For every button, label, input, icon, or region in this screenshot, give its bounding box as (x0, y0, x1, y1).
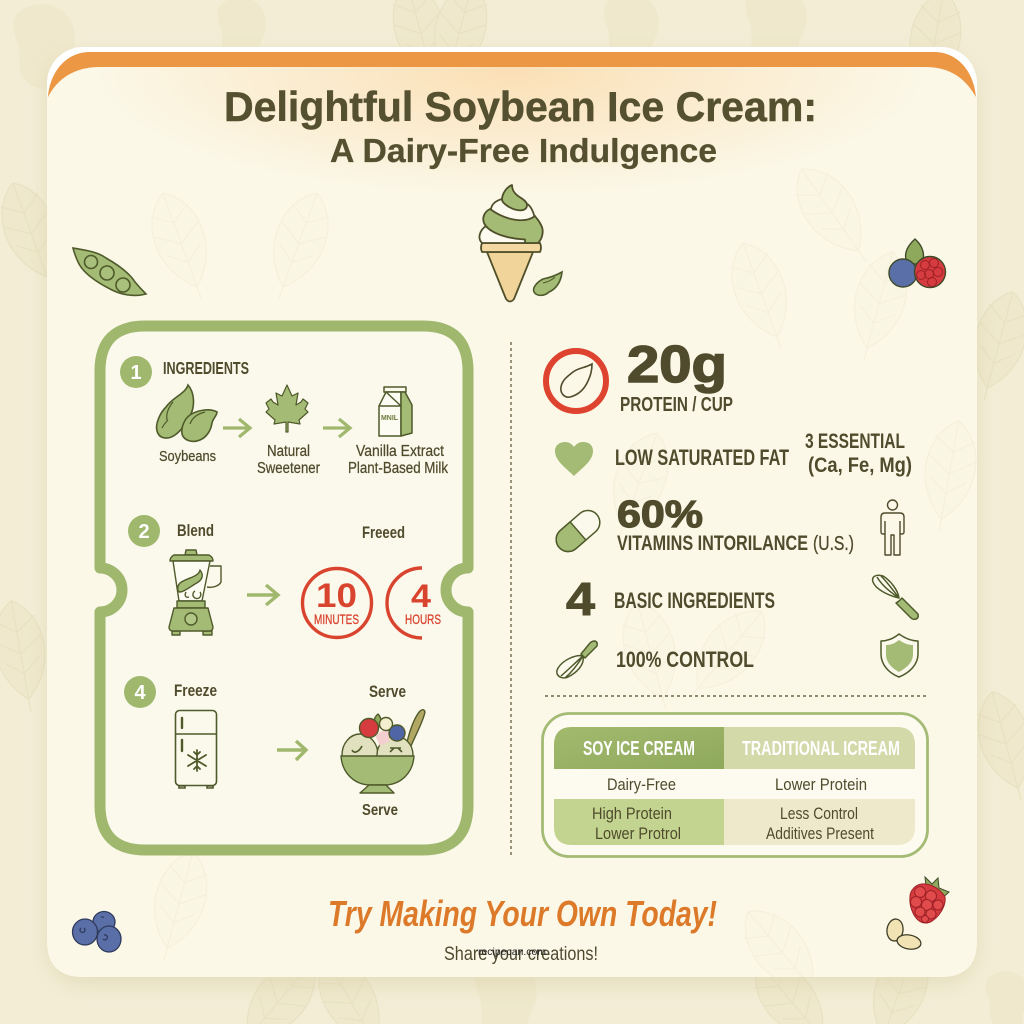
subtitle: A Dairy-Free Indulgence (330, 132, 717, 169)
title: Delightful Soybean Ice Cream: (224, 83, 817, 130)
stat: low saturated fat: LOW SATURATED FAT (615, 445, 789, 470)
row: less control (724, 799, 915, 845)
footer note: Share your creations! (444, 944, 598, 965)
icon: blender (169, 550, 221, 635)
label: natural sweetener: Natural (267, 443, 310, 460)
timer: 4 hours: HOURS (405, 611, 441, 627)
row: less control: Less Control (780, 805, 858, 823)
step 1 badge: 1 (130, 362, 142, 384)
stat: 60% vitamins: VITAMINS INTORILANCE (617, 532, 808, 555)
panel: recipe steps (100, 326, 468, 850)
icon: blueberries (72, 912, 121, 952)
timer: 10 minutes (302, 568, 372, 638)
arrow (247, 585, 278, 605)
row: lower protein: Lower Protein (775, 776, 867, 794)
timer: 10 minutes: 10 (316, 577, 357, 615)
stat: 60% vitamins: (U.S.) (813, 533, 854, 555)
stat: 3 essential minerals: (Ca, Fe, Mg) (808, 454, 912, 477)
stat: low saturated fat (555, 442, 789, 476)
source credit: recipecan.com (478, 947, 546, 958)
step 4 badge (124, 676, 156, 708)
icon: soft serve cone (479, 185, 543, 302)
icon: soybeans (157, 385, 217, 441)
label: vanilla extract and plant-based milk (348, 443, 448, 477)
label: vanilla extract and plant-based milk: Vanilla Extract (356, 443, 445, 460)
step 2 badge: 2 (138, 521, 150, 543)
stat: 3 essential minerals: 3 ESSENTIAL (805, 430, 905, 453)
stat: 20g protein: 20g (627, 336, 727, 394)
stat: 60% vitamins (551, 494, 854, 556)
stat: 4 basic ingredients: 4 (566, 573, 595, 625)
table header: soy: SOY ICE CREAM (583, 738, 695, 760)
icon: whisk right (873, 575, 918, 619)
arrow (223, 419, 250, 437)
row: dairy-free: Dairy-Free (607, 776, 676, 794)
icon: shield (881, 634, 918, 677)
comparison table (542, 714, 928, 856)
step 4 badge: 4 (134, 682, 146, 704)
table header: traditional: TRADITIONAL ICREAM (742, 738, 900, 760)
step 4 heading: Freeze (174, 682, 217, 700)
heading: serve: Serve (369, 683, 406, 701)
label: natural sweetener: Sweetener (257, 460, 320, 477)
step 2 badge (128, 515, 160, 547)
icon: sundae bowl (341, 710, 425, 793)
stat: 20g protein (546, 336, 733, 416)
label: natural sweetener (257, 443, 320, 477)
table header: soy (554, 727, 724, 769)
icon: person (881, 500, 904, 555)
icon: raspberry (910, 877, 949, 923)
icon: small soybean (534, 272, 562, 295)
stat: 20g protein: PROTEIN / CUP (620, 393, 733, 416)
timer: 4 hours (387, 568, 441, 638)
icon: maple leaf (266, 385, 308, 432)
heading: freeed: Freeed (362, 524, 405, 542)
stat: 4 basic ingredients (566, 573, 775, 625)
step 1 badge (120, 356, 152, 388)
icon: milk carton: MNIL (381, 415, 399, 422)
table header: traditional (724, 727, 915, 769)
label: vanilla extract and plant-based milk: Plant-Based Milk (348, 460, 448, 477)
row: high protein (554, 799, 724, 845)
section divider (545, 695, 926, 697)
icon: berries top right (889, 239, 946, 288)
column divider (510, 342, 512, 856)
label: serve: Serve (362, 802, 398, 819)
icon: freezer (176, 710, 216, 788)
row: less control: Additives Present (766, 825, 874, 843)
call to action: Try Making Your Own Today! (328, 893, 717, 934)
timer: 4 hours: 4 (411, 578, 431, 614)
arrow (323, 419, 350, 437)
icon: milk carton (379, 387, 412, 436)
icon: soybean pod (73, 248, 146, 295)
step 2 heading: Blend (177, 522, 214, 540)
stat: 60% vitamins: 60% (617, 494, 703, 536)
timer: 10 minutes: MINUTES (314, 611, 359, 627)
row: high protein: High Protein (592, 805, 672, 823)
stat: 100% control: 100% CONTROL (616, 647, 754, 672)
icon: soybeans bottom right (886, 918, 922, 951)
stat: 3 essential minerals (805, 430, 912, 477)
arrow (277, 741, 306, 760)
label: soybeans: Soybeans (159, 448, 216, 465)
icon: whisk left (557, 641, 597, 678)
stat: 4 basic ingredients: BASIC INGREDIENTS (614, 588, 775, 613)
row: high protein: Lower Protrol (595, 825, 681, 843)
step 1 heading: INGREDIENTS (163, 358, 249, 378)
